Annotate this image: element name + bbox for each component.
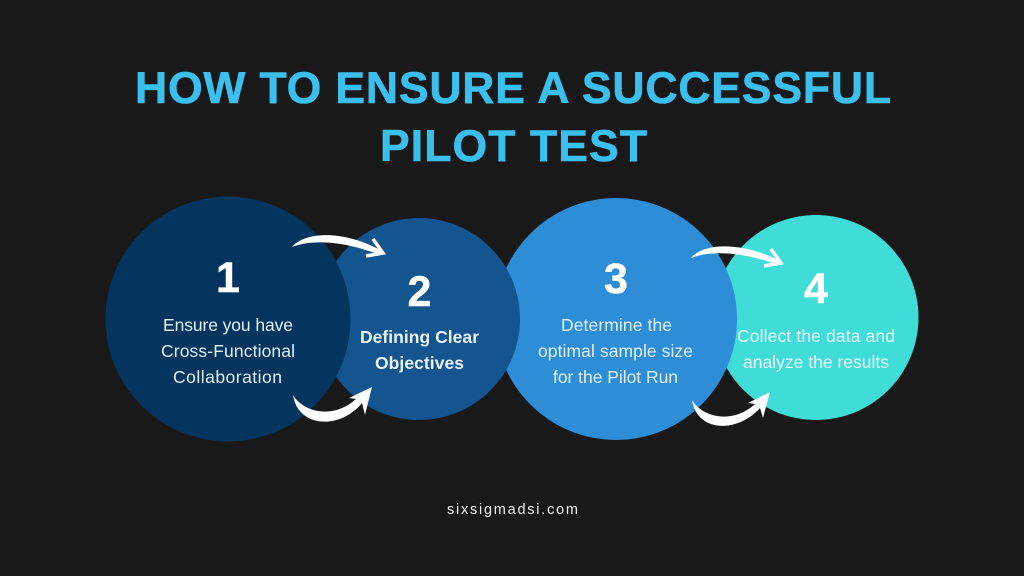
- title: [135, 64, 891, 171]
- step 1 content: [161, 254, 295, 387]
- panel: step 2 circle: [318, 218, 520, 420]
- step 4 content: [737, 265, 895, 372]
- arrow: step 1 to step 2, top: [292, 235, 383, 256]
- arrow: step 3 to step 4, top: [691, 246, 781, 266]
- arrow: step 3 to step 4, bottom: [692, 392, 770, 426]
- step 3 content: [538, 255, 693, 387]
- step 1 content: Cross-Functional: [161, 341, 295, 361]
- step 3 content: 3: [604, 255, 628, 303]
- step 3 content: Determine the: [561, 315, 672, 335]
- title: HOW TO ENSURE A SUCCESSFUL: [135, 64, 891, 113]
- step 1 content: Ensure you have: [163, 315, 293, 335]
- step 3 content: for the Pilot Run: [553, 367, 678, 387]
- step 1 content: 1: [216, 254, 240, 302]
- step 2 content: Defining Clear: [360, 327, 479, 347]
- title: PILOT TEST: [380, 122, 647, 171]
- panel: step 3 circle: [495, 198, 737, 440]
- step 3 content: optimal sample size: [538, 341, 693, 361]
- step 2 content: Objectives: [375, 353, 464, 373]
- panel: step 4 circle: [714, 215, 918, 420]
- step 4 content: Collect the data and: [737, 326, 895, 346]
- step 2 content: [360, 268, 479, 373]
- arrow: step 1 to step 2, bottom: [293, 387, 372, 422]
- step 1 content: Collaboration: [173, 367, 282, 387]
- footer: website: sixsigmadsi.com: [447, 502, 578, 518]
- step 2 content: 2: [408, 268, 431, 316]
- step 4 content: 4: [804, 265, 828, 313]
- panel: step 1 circle: [106, 196, 350, 442]
- step 4 content: analyze the results: [743, 352, 889, 372]
